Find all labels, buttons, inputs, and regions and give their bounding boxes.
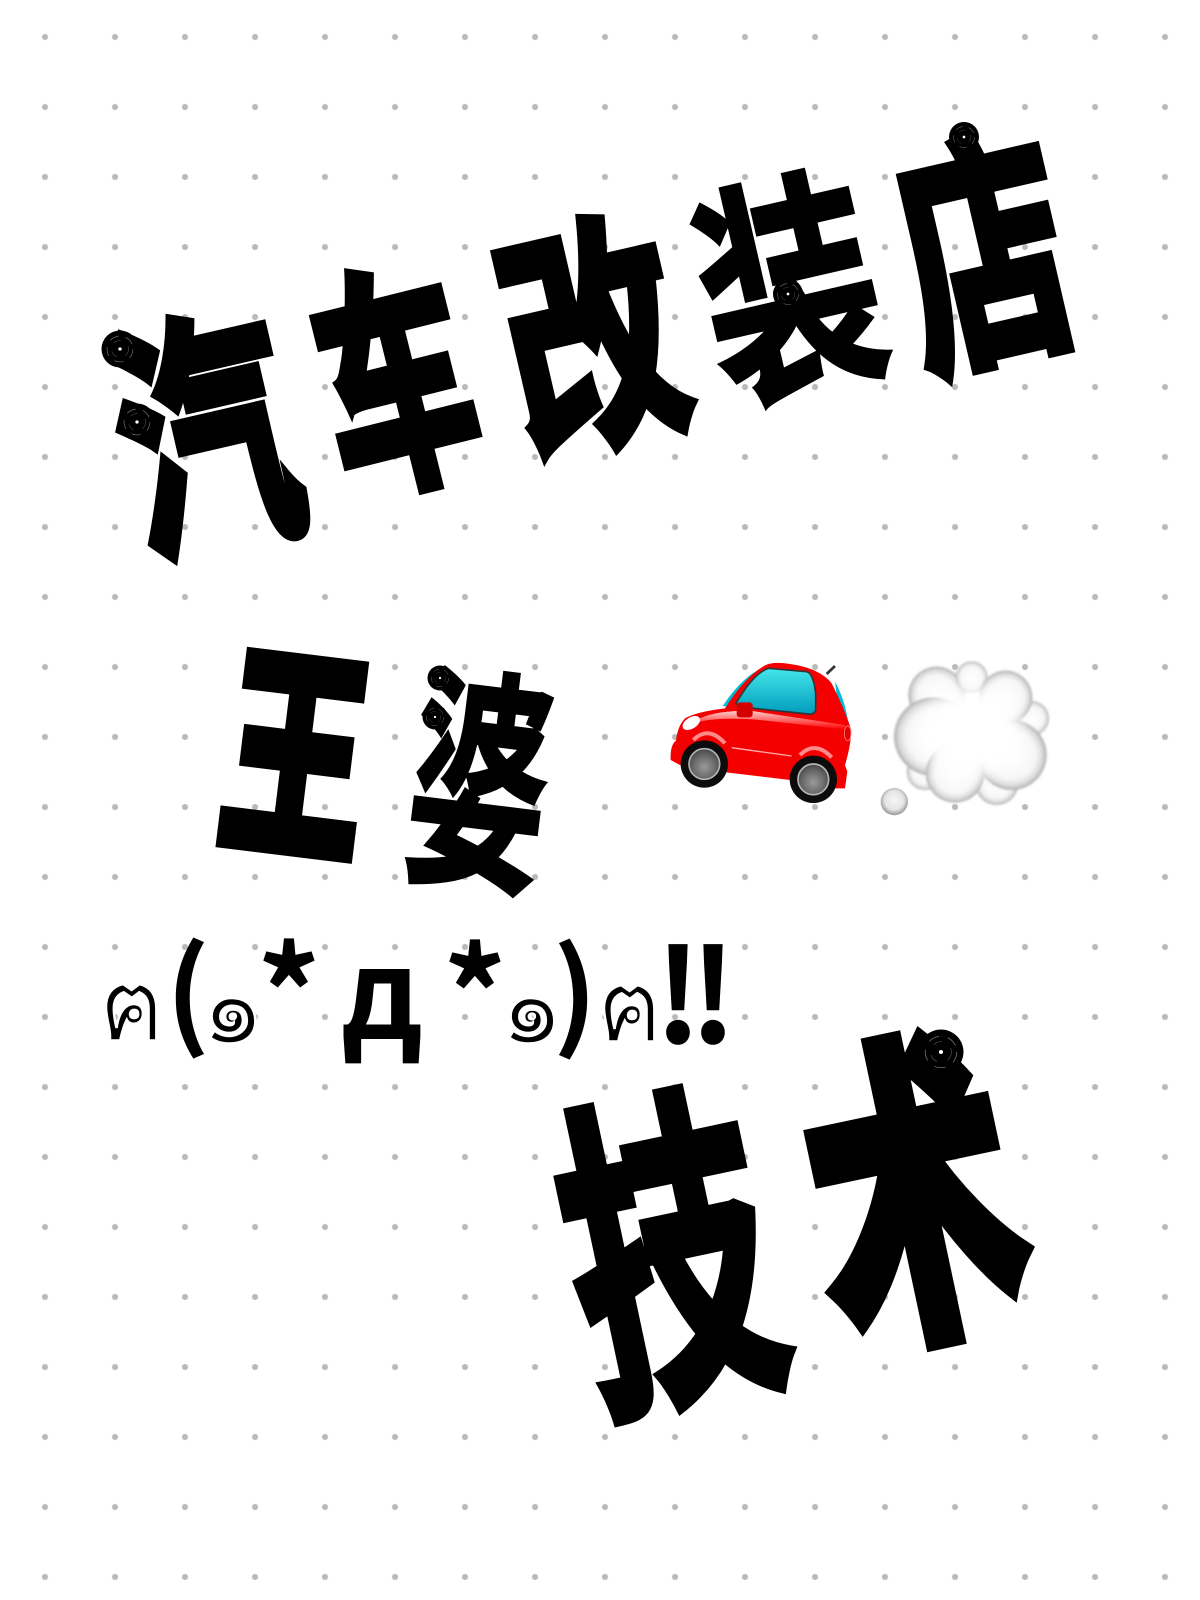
record dot on 汽 upper [102,330,138,368]
character: 改: 改 [478,192,709,497]
glyph: right parenthesis: ) [553,900,597,1070]
glyph: д: д [342,894,422,1075]
glyph: exclamation marks: !! [654,893,737,1081]
title line: 汽车改装店 [91,105,1097,599]
character: 婆: 婆 [394,650,564,928]
glyph: ฅ left: ฅ [99,924,165,1069]
name: 王婆 [210,628,564,928]
glyph: asterisk left: * [257,895,321,1077]
glyph: asterisk right: * [443,896,507,1078]
glyph: ๑ right: ๑ [500,927,564,1072]
character: 技: 技 [533,1060,810,1467]
record dot on 婆 lower [422,704,448,730]
character: 王: 王 [210,628,380,894]
record dot on 术 [918,1030,964,1074]
character: 车: 车 [292,241,502,536]
glyph: ๑ left: ๑ [201,927,265,1072]
character: 汽: 汽 [91,285,323,599]
record dot on 装 [773,279,803,309]
character: 装: 装 [675,148,907,443]
icon: red car emoji [671,663,851,803]
glyph: ฅ right: ฅ [597,925,663,1070]
kaomoji line [99,893,737,1081]
character: 术: 术 [781,1009,1050,1397]
title line: 技术 [533,1009,1050,1467]
character: 店: 店 [873,105,1097,413]
record dot on 汽 lower [118,404,156,440]
glyph: left parenthesis: ( [166,899,210,1069]
record dot on 店 [949,122,979,152]
record dot on 婆 upper [428,666,452,690]
icon: thought bubble emoji [881,661,1049,815]
